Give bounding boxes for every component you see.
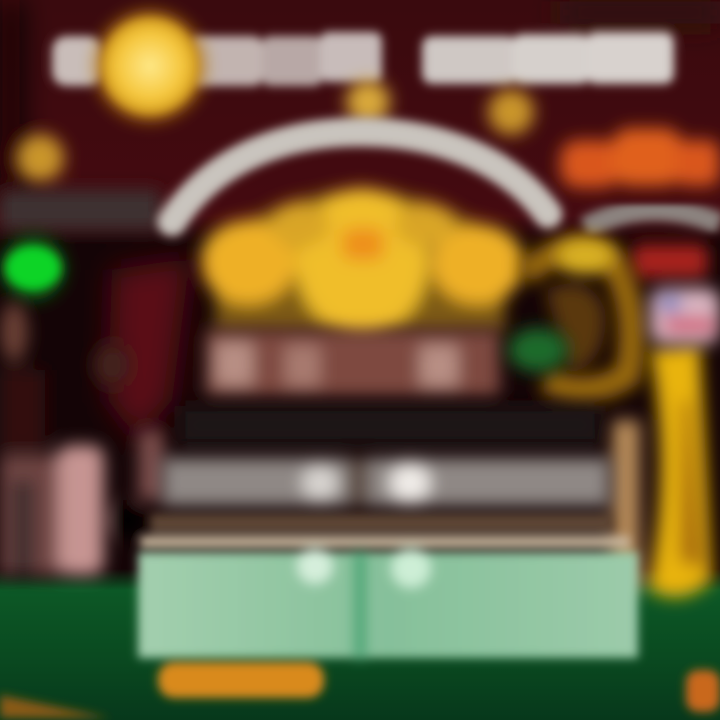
red curtain	[108, 258, 190, 440]
gold column at right	[612, 345, 712, 597]
lion figure	[508, 238, 631, 389]
left ledge	[0, 190, 160, 230]
green table body	[138, 548, 638, 658]
orange sign at right	[560, 128, 720, 188]
row of prize cards	[205, 330, 500, 396]
orange button	[158, 662, 324, 698]
red banner at right	[632, 244, 708, 278]
arch	[172, 132, 548, 222]
orange button at right	[686, 670, 720, 712]
brown band	[140, 514, 630, 548]
background shading	[0, 0, 720, 200]
flag	[650, 288, 720, 344]
orange corner	[0, 695, 110, 718]
central gold panel	[200, 188, 524, 336]
green light	[1, 236, 65, 300]
title: left word	[52, 32, 382, 86]
title: right word	[422, 32, 674, 84]
lights	[16, 80, 534, 182]
icon: gold orb	[96, 12, 204, 120]
left figure	[0, 302, 164, 575]
grey table header	[162, 458, 610, 506]
right arch	[585, 210, 720, 228]
dark band	[180, 406, 600, 444]
